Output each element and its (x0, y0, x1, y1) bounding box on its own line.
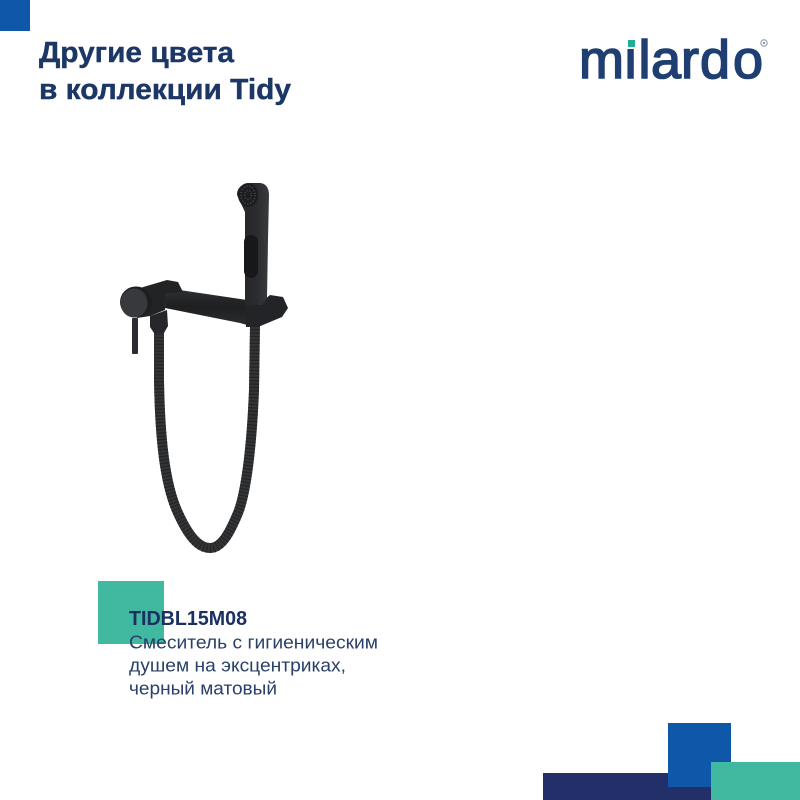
title: в коллекции Tidy (39, 74, 291, 106)
spout arm (165, 288, 247, 325)
product: black faucet with hygienic shower (120, 183, 288, 548)
shower hose (159, 320, 255, 548)
product description: черный матовый (129, 678, 277, 698)
shower head face (238, 183, 258, 207)
corner square: top left (0, 0, 30, 31)
product code: TIDBL15M08 (129, 608, 247, 630)
product description (129, 632, 378, 698)
product caption (129, 608, 378, 698)
title (39, 37, 291, 106)
product description: душем на эксцентриках, (129, 656, 346, 676)
wall elbow connector (150, 310, 168, 333)
hand shower handle (237, 183, 269, 305)
shower button (244, 235, 258, 278)
logo: milardo: milardo (579, 30, 763, 90)
teal accent square (98, 581, 164, 644)
mixer body top (137, 280, 183, 318)
corner blocks: bottom right (543, 723, 800, 800)
title: Другие цвета (39, 37, 235, 69)
product description: Смеситель с гигиеническим (129, 632, 378, 652)
right wall bracket (246, 295, 288, 327)
lever handle (132, 318, 138, 354)
mixer cartridge face (120, 286, 152, 318)
